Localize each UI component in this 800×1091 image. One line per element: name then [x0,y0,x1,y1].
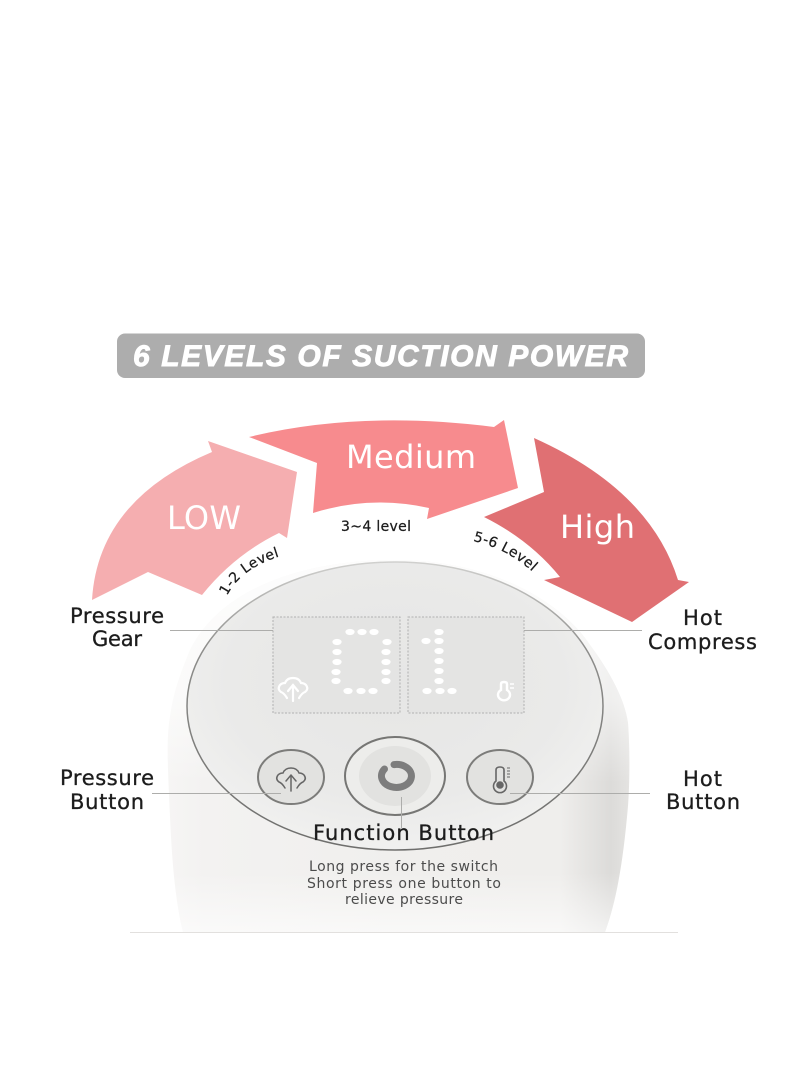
digit 0 in dots [331,629,392,694]
label: hot button [666,767,740,814]
label: hot compress: Compress [648,630,757,654]
label: hot compress: Hot [683,606,722,630]
label: pressure button [60,766,154,814]
arrow: high [484,438,689,622]
pressure button [258,750,324,804]
label: pressure gear: Pressure [70,604,164,628]
icon: thermometer [494,767,510,793]
label: hot button: Button [666,790,740,814]
display box: left [273,617,400,713]
arrow: low [92,441,297,600]
display box: right [408,617,524,713]
title banner: 6 LEVELS OF SUCTION POWER [133,340,628,373]
icon: display pressure cloud [279,678,307,701]
title banner [117,334,645,378]
arrow: medium: Medium [346,438,476,476]
label: pressure button: Button [70,790,144,814]
icon: power ring [381,764,411,787]
label: hot button: Hot [683,767,722,791]
function description: Long press for the switch [309,859,498,875]
label: pressure gear: Gear [92,627,142,651]
level label: 5-6 level: 5-6 Level [474,531,538,571]
icon: pressure cloud [277,768,305,791]
arrow: high: High [560,508,635,546]
hot button [467,750,533,804]
device body [130,560,678,932]
display [273,617,524,713]
label: hot compress [648,606,757,654]
arrow: low: LOW [167,499,241,537]
leader lines [152,630,650,828]
label: pressure button: Pressure [60,766,154,790]
digit 1 in dots [421,629,457,694]
label: function button: Function Button [313,821,494,845]
function button [345,737,445,815]
arrow: medium [249,420,518,519]
control panel face [187,562,603,850]
function description: relieve pressure [345,892,463,908]
level label: 3-4 level: 3~4 level [341,519,411,535]
function description [307,859,501,908]
icon: display thermometer [498,682,514,700]
function description: Short press one button to [307,876,501,892]
level label: 1-2 level: 1-2 Level [219,546,278,594]
label: pressure gear [70,604,164,651]
